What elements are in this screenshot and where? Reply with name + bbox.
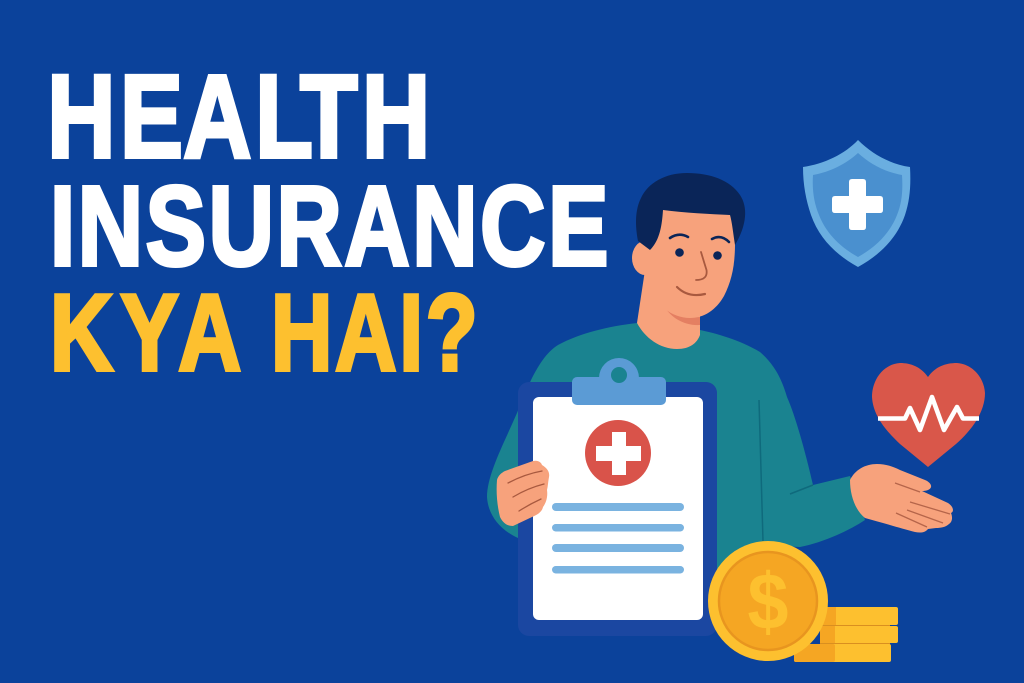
dollar coin: $ <box>748 557 788 647</box>
open hand <box>850 464 953 533</box>
icon: shield with cross <box>803 140 910 267</box>
title line: KYA HAI?: KYA <box>50 272 241 393</box>
holding hand <box>497 461 549 526</box>
clipboard <box>518 358 717 636</box>
eyes <box>675 248 684 257</box>
coins <box>708 541 898 662</box>
neck shadow <box>663 304 700 325</box>
icon: heart with pulse <box>872 363 985 467</box>
neck <box>637 270 700 349</box>
nose <box>696 252 707 280</box>
clip <box>572 358 666 405</box>
title <box>47 50 608 393</box>
paper <box>533 397 703 620</box>
sleeve fold lines <box>759 400 813 541</box>
title line: HEALTH: HEALTH <box>47 50 430 182</box>
document lines <box>552 503 684 574</box>
knuckle lines <box>508 471 544 511</box>
ear <box>632 241 658 275</box>
clipboard board <box>518 382 717 636</box>
title line: INSURANCE: INSURANCE <box>50 162 608 289</box>
coin stack <box>794 607 898 662</box>
red cross badge <box>585 420 651 486</box>
hair <box>636 173 745 250</box>
torso and sleeves <box>487 323 865 570</box>
face <box>645 208 735 318</box>
title line: KYA HAI?: HAI? <box>271 272 478 393</box>
eyebrows <box>670 235 729 242</box>
dollar coin <box>708 541 828 661</box>
title line: KYA HAI? <box>50 272 478 393</box>
finger lines <box>895 483 950 527</box>
smile <box>677 287 705 295</box>
person illustration <box>487 173 953 570</box>
